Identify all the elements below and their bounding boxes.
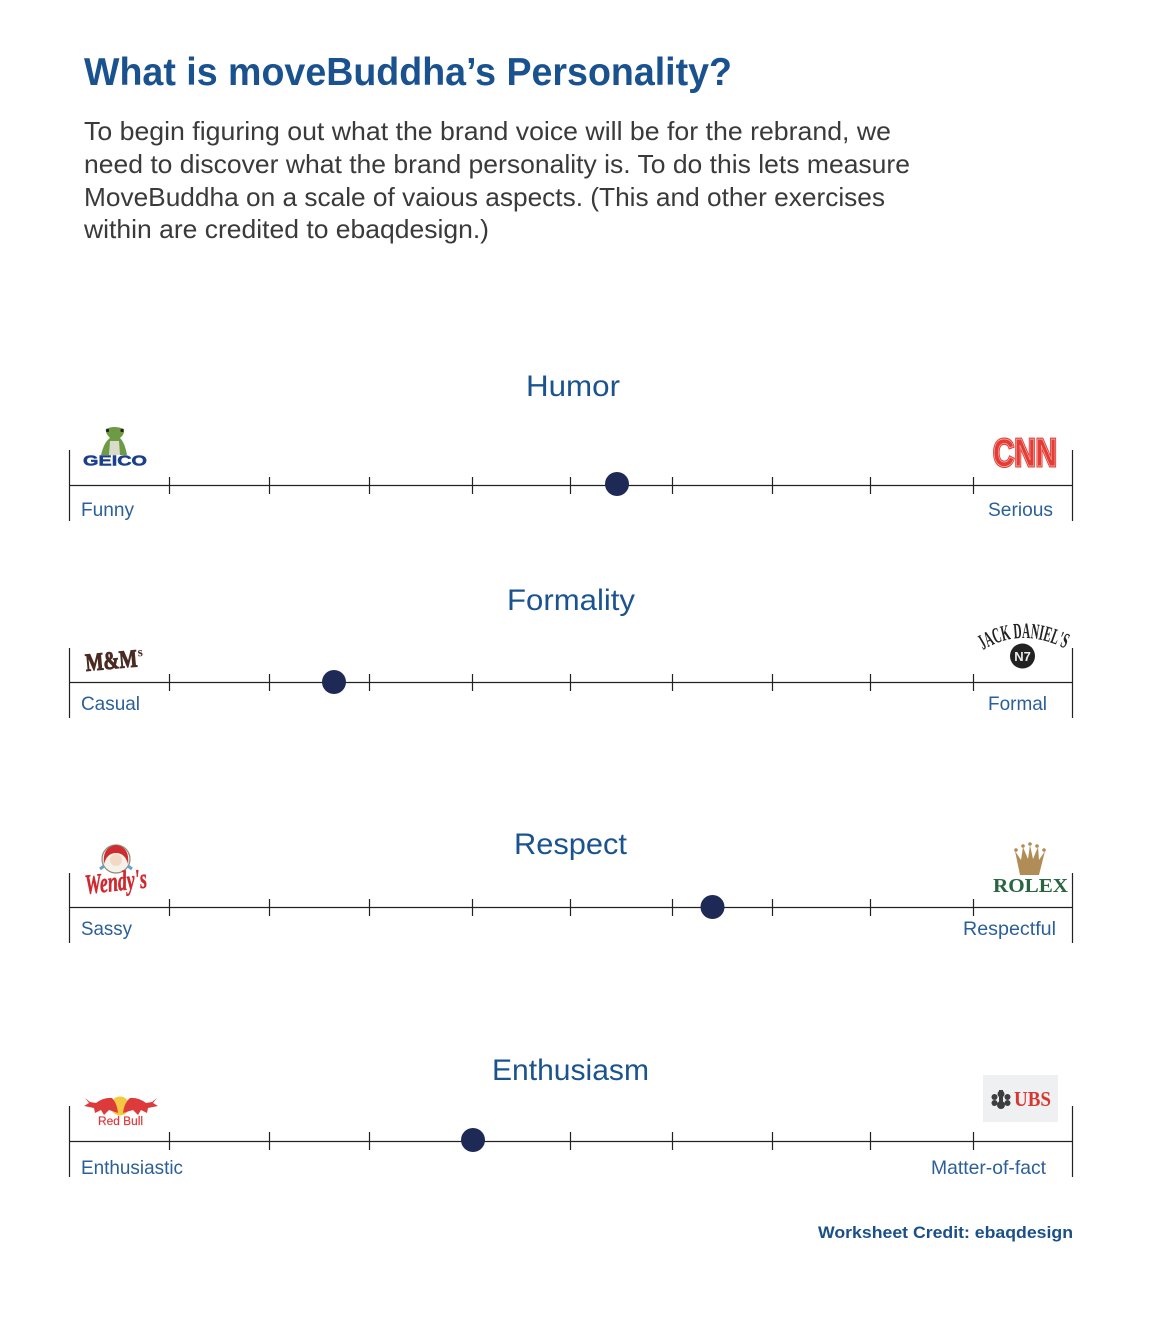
marker: humor <box>605 472 629 496</box>
icon: Jack Daniel's logo: JACK DANIEL'S <box>977 624 1070 650</box>
heading: Humor: Humor <box>526 370 620 403</box>
scale axis: respect <box>69 873 1072 943</box>
icon: GEICO logo <box>83 427 147 470</box>
intro text block <box>83 116 910 244</box>
label: Respectful: Respectful <box>963 918 1056 940</box>
heading: Enthusiasm: Enthusiasm <box>492 1054 649 1087</box>
intro text block: To begin figuring out what the brand voice will be for the rebrand, we <box>84 116 891 146</box>
icon: CNN logo: CNN <box>993 432 1057 475</box>
intro text block: need to discover what the brand personality is. To do this lets measure <box>84 149 910 179</box>
icon: Red Bull logo: Red Bull <box>98 1116 143 1128</box>
marker: enthusiasm <box>461 1128 485 1152</box>
marker: formality <box>322 670 346 694</box>
scale axis: formality <box>69 648 1072 718</box>
label: Sassy: Sassy <box>81 918 132 940</box>
panel: formality scale <box>68 584 1074 718</box>
heading: Formality: Formality <box>507 584 635 617</box>
icon: Wendy's logo: Wendy's <box>83 864 148 901</box>
icon: Jack Daniel's logo <box>977 624 1070 668</box>
panel: enthusiasm scale <box>69 1054 1072 1179</box>
marker: respect <box>700 895 724 919</box>
worksheet credit: Worksheet Credit: ebaqdesign <box>818 1223 1073 1242</box>
icon: Jack Daniel's logo: N7 <box>1014 649 1031 664</box>
panel: respect scale <box>69 828 1072 943</box>
icon: Rolex logo: ROLEX <box>993 875 1069 897</box>
icon: UBS logo: UBS <box>1014 1087 1051 1111</box>
panel: humor scale <box>69 370 1072 521</box>
label: Serious: Serious <box>988 499 1053 521</box>
icon: M&M's logo: s <box>137 644 143 659</box>
label: Casual: Casual <box>81 693 140 715</box>
icon: CNN logo: CNN <box>993 432 1057 475</box>
intro text block: within are credited to ebaqdesign.) <box>83 214 489 244</box>
icon: Wendy's logo <box>83 845 148 901</box>
icon: Red Bull logo <box>84 1096 158 1128</box>
title: What is moveBuddha’s Personality? <box>84 51 732 94</box>
label: Matter-of-fact: Matter-of-fact <box>931 1157 1047 1179</box>
label: Formal: Formal <box>988 693 1047 715</box>
heading: Respect: Respect <box>514 828 628 861</box>
label: Funny: Funny <box>81 499 134 521</box>
scale axis: enthusiasm <box>69 1106 1072 1177</box>
icon: UBS logo <box>983 1075 1058 1122</box>
scale axis: humor <box>69 450 1072 521</box>
icon: M&M's logo: M&M <box>84 646 138 677</box>
label: Enthusiastic: Enthusiastic <box>81 1157 183 1179</box>
icon: GEICO logo: GEICO <box>83 452 147 470</box>
icon: Rolex logo <box>993 842 1069 897</box>
intro text block: MoveBuddha on a scale of vaious aspects. (This and other exercises <box>84 182 885 212</box>
